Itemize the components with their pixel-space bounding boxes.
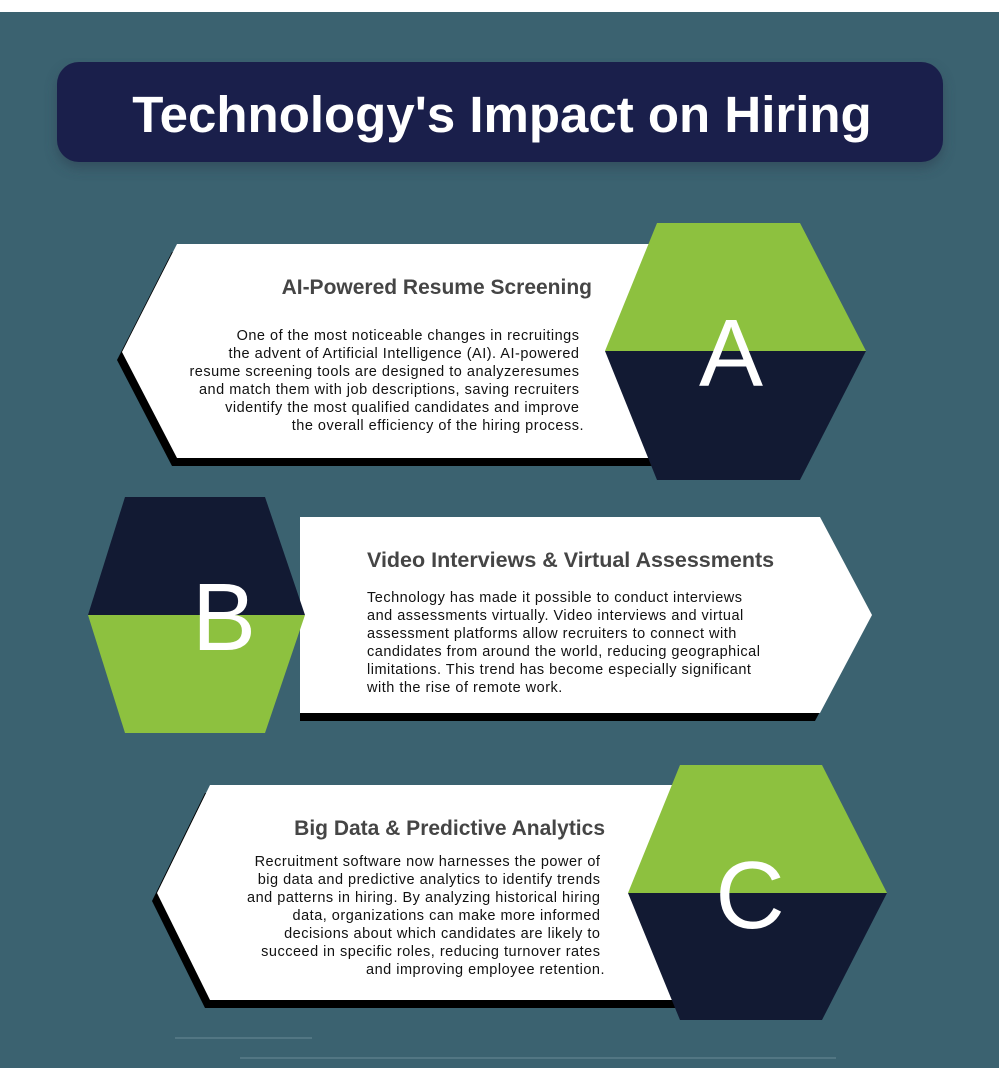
title: Technology's Impact on Hiring — [132, 86, 872, 143]
body A: videntify the most qualified candidates and improve — [225, 400, 579, 416]
body A: resume screening tools are designed to analyzeresumes — [189, 364, 579, 380]
body B: assessment platforms allow recruiters to connect with — [367, 626, 737, 642]
hexagon A: A — [699, 300, 763, 407]
title — [57, 62, 943, 168]
body C: data, organizations can make more informed — [293, 908, 600, 924]
panel: A — [117, 223, 866, 480]
body B: Technology has made it possible to conduct interviews — [367, 590, 742, 606]
hexagon B: B — [192, 564, 256, 671]
body A: the overall efficiency of the hiring process. — [292, 418, 584, 434]
body A: One of the most noticeable changes in recruitings — [237, 328, 579, 344]
body C: succeed in specific roles, reducing turnover rates — [261, 944, 600, 960]
body B: and assessments virtually. Video interviews and virtual — [367, 608, 744, 624]
body B: with the rise of remote work. — [366, 680, 563, 696]
heading A: AI-Powered Resume Screening — [282, 276, 592, 299]
hexagon C: C — [715, 842, 785, 949]
hexagon C — [628, 765, 887, 1020]
body A: the advent of Artificial Intelligence (AI). AI-powered — [228, 346, 579, 362]
hexagon B — [88, 497, 305, 733]
heading C: Big Data & Predictive Analytics — [294, 817, 605, 840]
body C: big data and predictive analytics to identify trends — [258, 872, 600, 888]
body B: limitations. This trend has become especially significant — [367, 662, 751, 678]
heading B: Video Interviews & Virtual Assessments — [367, 548, 774, 572]
panel: C — [152, 765, 887, 1020]
body A: and match them with job descriptions, saving recruiters — [199, 382, 579, 398]
body C: decisions about which candidates are likely to — [284, 926, 600, 942]
panel: B — [88, 497, 872, 733]
body B: candidates from around the world, reducing geographical — [367, 644, 760, 660]
hexagon A — [605, 223, 866, 480]
body C: and improving employee retention. — [366, 962, 605, 978]
body C: and patterns in hiring. By analyzing historical hiring — [247, 890, 600, 906]
body C: Recruitment software now harnesses the power of — [255, 854, 601, 870]
